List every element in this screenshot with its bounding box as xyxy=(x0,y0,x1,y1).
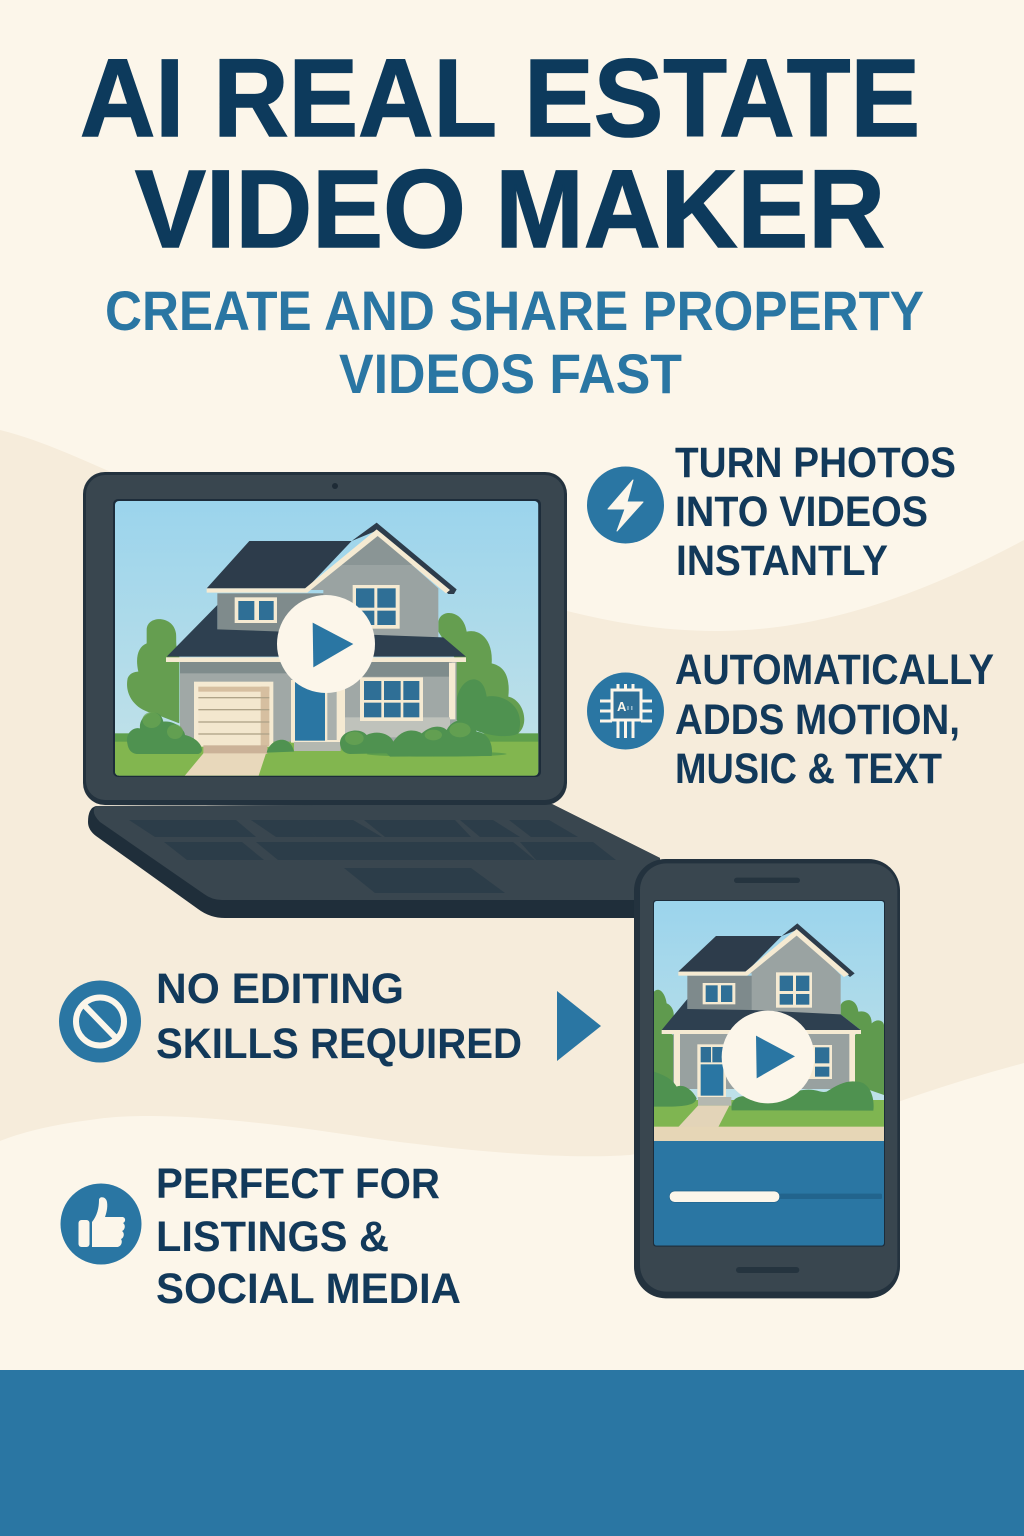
left tree xyxy=(127,619,179,723)
text: SKILLS REQUIRED xyxy=(156,1020,522,1068)
title: VIDEO MAKER xyxy=(135,148,885,271)
text xyxy=(156,1160,461,1313)
icon: AI chip: A xyxy=(617,699,627,714)
icon: AI chip: ı ı xyxy=(627,705,633,712)
subtitle: CREATE AND SHARE PROPERTY xyxy=(105,279,924,342)
laptop xyxy=(83,472,660,918)
phone xyxy=(634,859,900,1298)
subtitle: VIDEOS FAST xyxy=(339,342,682,405)
phone body xyxy=(634,859,900,1298)
text: NO EDITING xyxy=(156,965,404,1013)
item: no editing skills xyxy=(59,965,522,1068)
right tree xyxy=(438,613,524,736)
text: MUSIC & TEXT xyxy=(675,745,942,793)
bushes xyxy=(127,712,492,757)
icon: AI chip xyxy=(587,672,664,750)
title xyxy=(80,37,920,271)
text xyxy=(675,439,956,585)
text: LISTINGS & xyxy=(156,1213,389,1261)
laptop screen: house with play button xyxy=(115,501,538,777)
phone screen: house with play button xyxy=(654,901,884,1246)
laptop lid xyxy=(83,472,567,805)
laptop base xyxy=(88,804,660,918)
title: AI REAL ESTATE xyxy=(80,37,920,160)
item: turn photos into videos xyxy=(587,439,956,585)
icon: prohibited sign xyxy=(59,980,141,1062)
icon: lightning bolt xyxy=(587,466,664,544)
text: INTO VIDEOS xyxy=(675,488,928,536)
text: INSTANTLY xyxy=(676,537,888,585)
arrow xyxy=(557,991,601,1061)
subtitle xyxy=(105,279,924,405)
icon: thumbs up xyxy=(60,1184,142,1264)
text: ADDS MOTION, xyxy=(675,696,960,744)
text: PERFECT FOR xyxy=(156,1160,440,1208)
footer band xyxy=(0,1370,1024,1536)
text: TURN PHOTOS xyxy=(675,439,956,487)
text: SOCIAL MEDIA xyxy=(156,1265,461,1313)
text xyxy=(675,646,994,793)
text xyxy=(156,965,522,1068)
item: automatic motion, music and text xyxy=(587,646,994,793)
item: listings and social media xyxy=(60,1160,461,1313)
